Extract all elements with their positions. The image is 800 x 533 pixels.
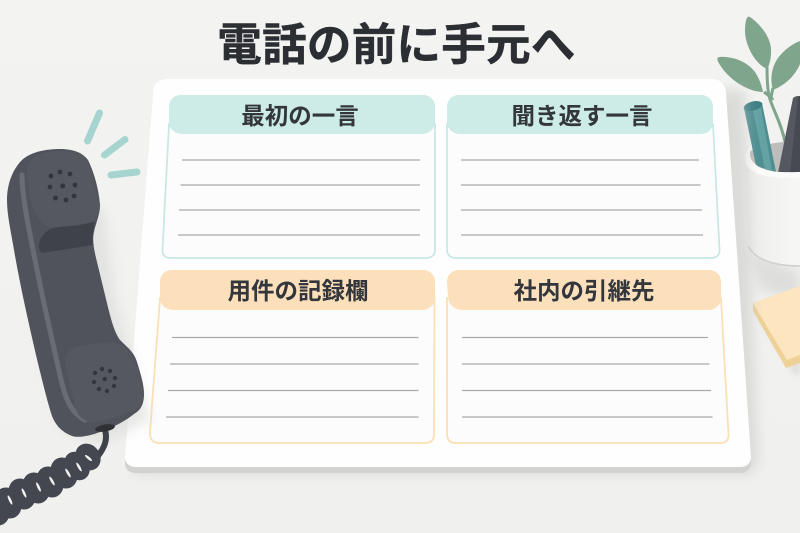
title: 電話の前に手元へ bbox=[217, 21, 576, 70]
panel: 聞き返す一言 bbox=[447, 95, 720, 258]
panel: 最初の一言 bbox=[162, 95, 435, 258]
panel: 用件の記録欄 bbox=[150, 270, 435, 443]
notepad board bbox=[125, 79, 758, 474]
mouthpiece holes bbox=[92, 367, 117, 393]
handle recess bbox=[39, 222, 95, 253]
panel: 用件の記録欄: 用件の記録欄 bbox=[228, 278, 368, 304]
dark pen bbox=[778, 96, 800, 173]
cup body bbox=[744, 160, 800, 266]
mouthpiece bbox=[65, 343, 143, 422]
cup interior bbox=[744, 141, 800, 179]
panel: 最初の一言: 最初の一言 bbox=[241, 103, 359, 129]
handset body bbox=[7, 149, 144, 437]
coiled cord bbox=[0, 430, 106, 530]
cord socket bbox=[95, 423, 115, 433]
panel: 聞き返す一言: 聞き返す一言 bbox=[512, 103, 652, 129]
plant, pens and cup bbox=[717, 17, 800, 300]
sticky note bbox=[753, 286, 800, 376]
earpiece holes bbox=[48, 170, 77, 202]
plant bbox=[717, 17, 800, 142]
icon: telephone handset bbox=[0, 149, 150, 530]
panel: 社内の引継先: 社内の引継先 bbox=[514, 278, 654, 304]
earpiece bbox=[27, 151, 100, 228]
icon: ringing marks bbox=[88, 113, 137, 175]
panel: 社内の引継先 bbox=[447, 270, 729, 443]
teal pen bbox=[743, 99, 776, 172]
handle highlight bbox=[22, 175, 85, 420]
